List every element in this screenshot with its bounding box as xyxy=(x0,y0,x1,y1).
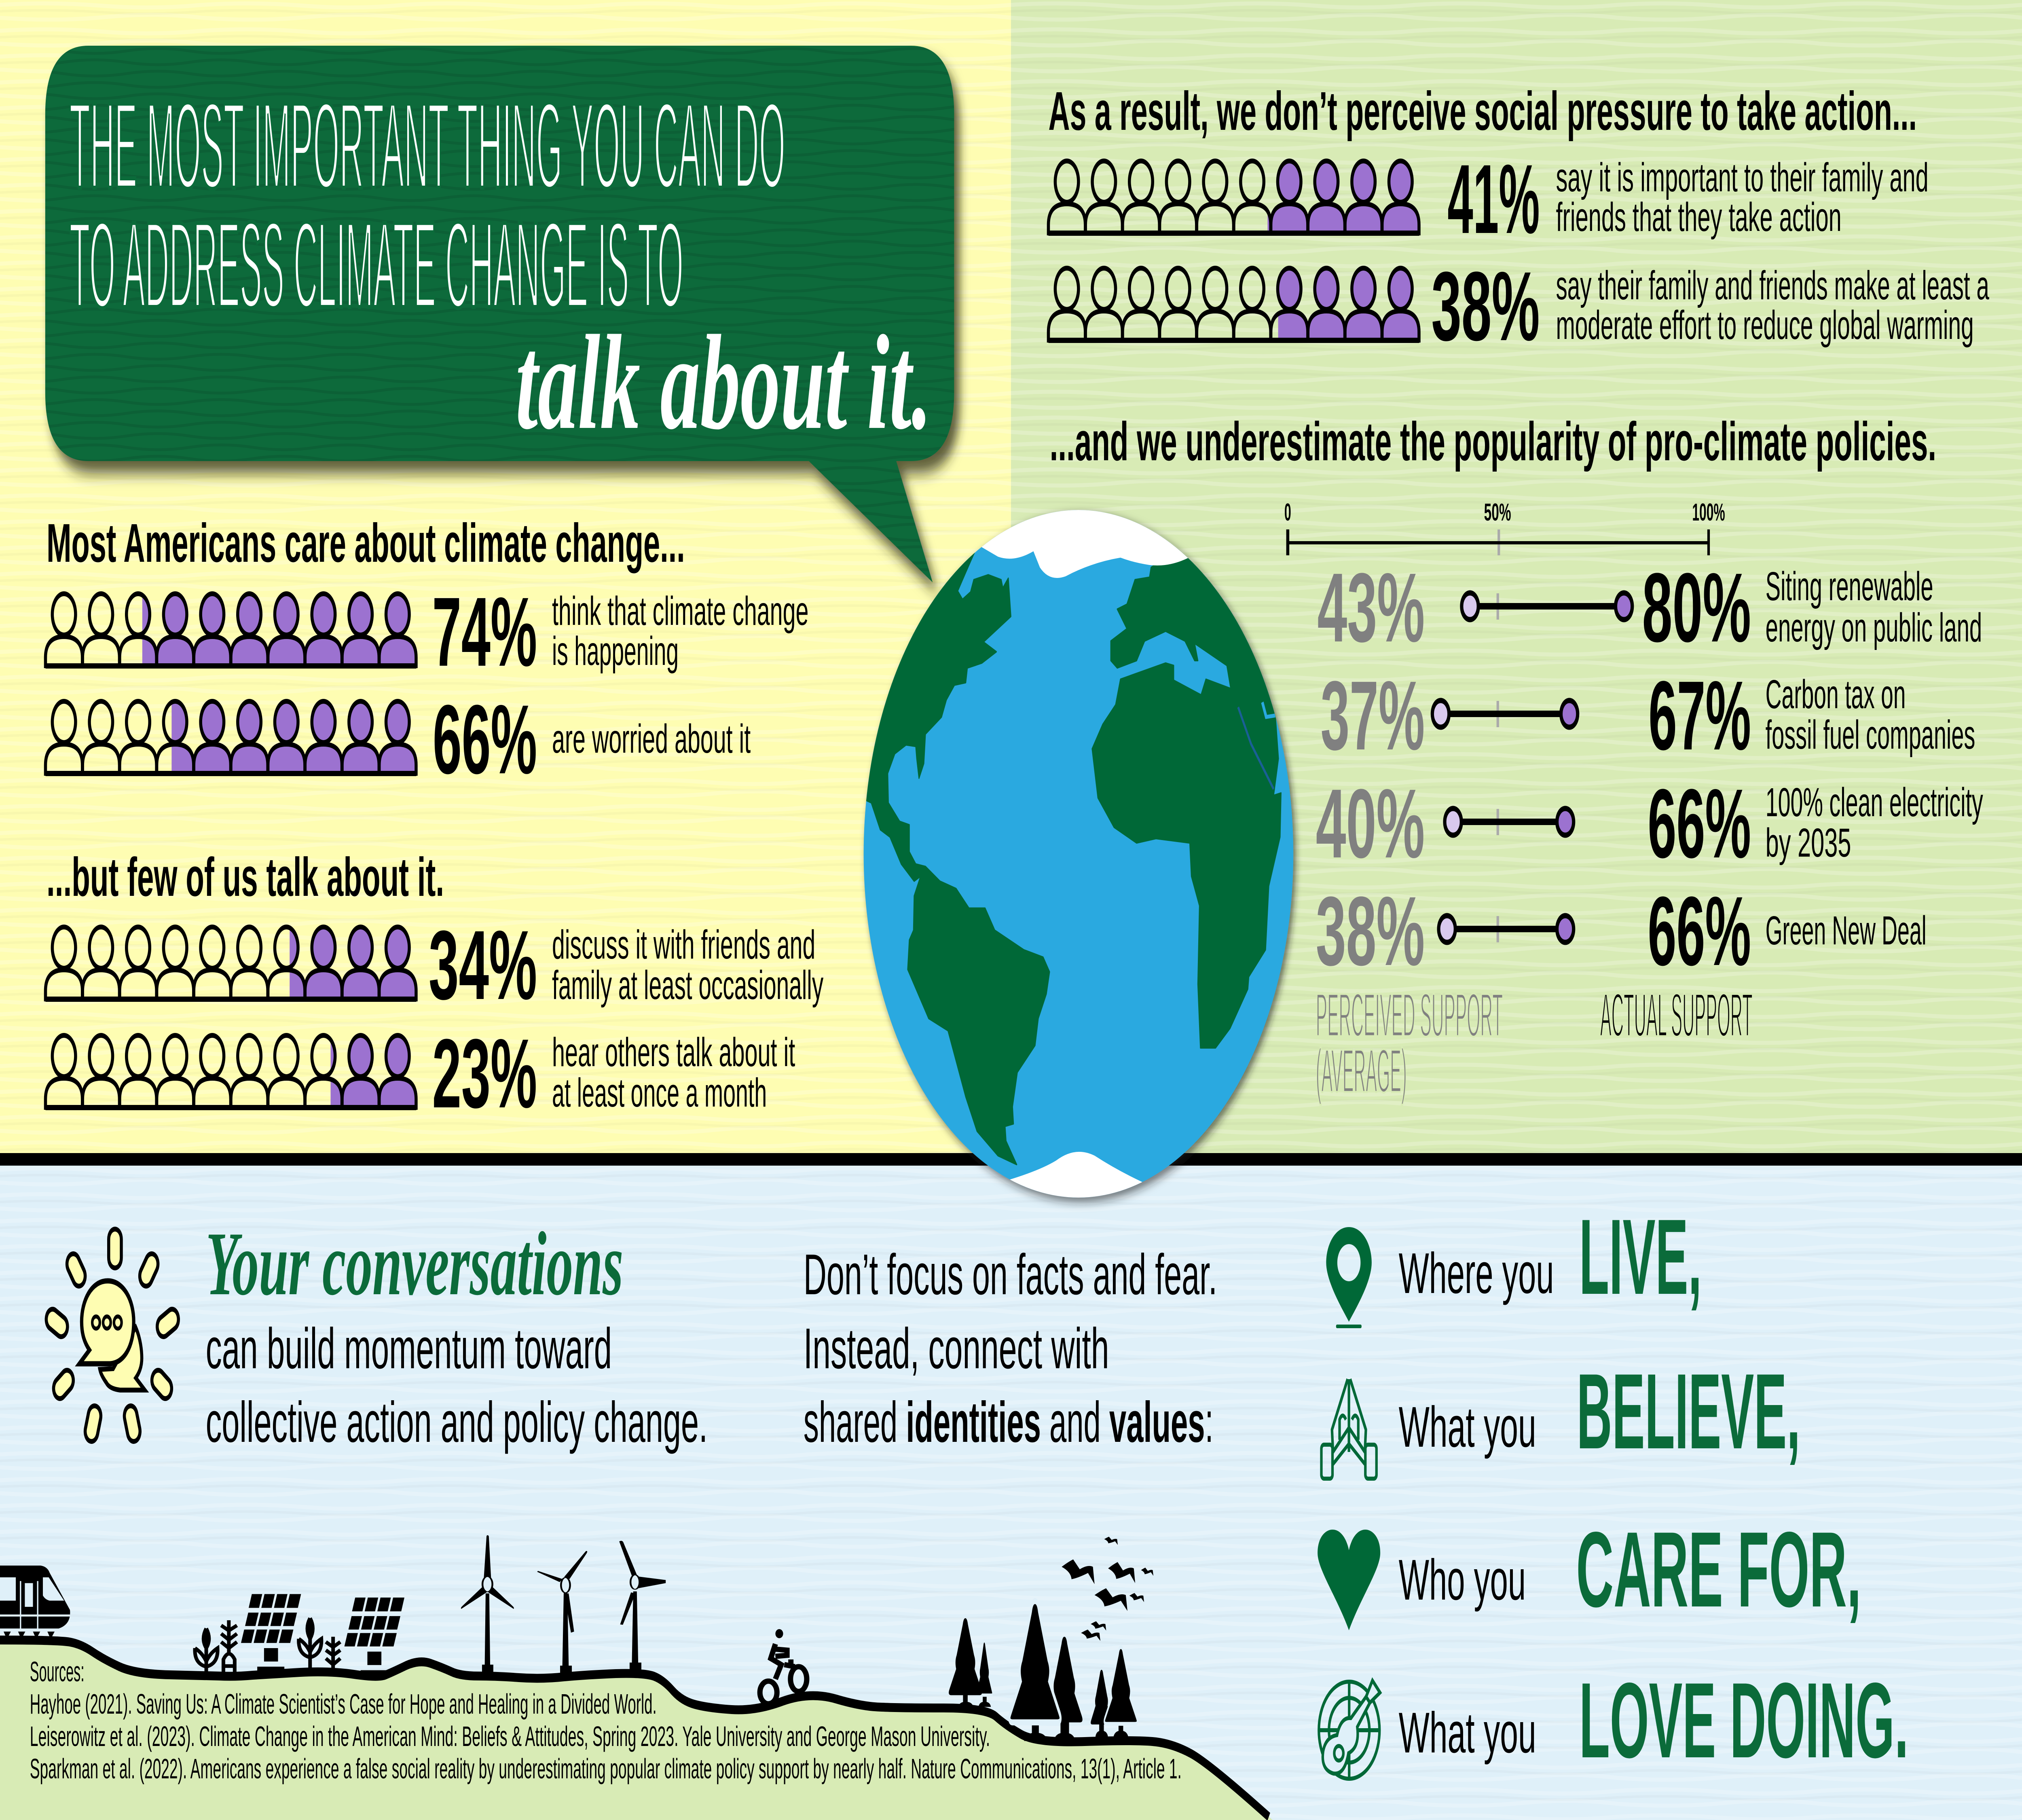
description: discuss: discuss it with friends and xyxy=(552,922,815,967)
row: carbon tax: 67% xyxy=(1648,661,1751,770)
row: carbon tax xyxy=(1321,661,1975,770)
pictogram: 34 percent xyxy=(45,927,416,1002)
icon: solar panel xyxy=(241,1594,301,1674)
text: don't focus on facts: Instead, connect with xyxy=(804,1317,1109,1381)
dumbbell chart: ACTUAL SUPPORT xyxy=(1600,980,1753,1049)
description: family: family at least occasionally xyxy=(552,963,823,1008)
row: siting renewable: Siting renewable xyxy=(1766,564,1933,609)
row: clean electricity: 66% xyxy=(1648,769,1751,878)
sources: Hayhoe (2021). Saving Us: A Climate Scientist’s Case for Hope and Healing in a Divided World. xyxy=(30,1689,657,1720)
heading: few talk about it: ...but few of us talk about it. xyxy=(47,847,444,908)
text: don't focus on facts: shared identities and values: xyxy=(804,1390,1214,1454)
sources xyxy=(30,1656,1182,1785)
icon: cyclist xyxy=(760,1629,807,1704)
title emphasis: talk about it. xyxy=(516,308,932,457)
word: live: LIVE, xyxy=(1579,1197,1702,1316)
label: what you: What you xyxy=(1399,1701,1536,1765)
row: siting renewable: 80% xyxy=(1642,553,1751,662)
stat row: 34% xyxy=(45,910,823,1020)
text: don't focus on facts xyxy=(804,1243,1217,1454)
row: green new deal xyxy=(1316,876,1927,986)
axis: 0 xyxy=(1284,499,1291,526)
word: love doing: LOVE DOING. xyxy=(1579,1660,1908,1780)
row: carbon tax: fossil fuel companies xyxy=(1766,712,1975,758)
row: siting renewable: energy on public land xyxy=(1766,605,1982,650)
description: monthly: at least once a month xyxy=(552,1070,767,1115)
icon: location pin xyxy=(1326,1227,1372,1328)
icon: solar panel xyxy=(345,1598,404,1677)
number: 38%: 38% xyxy=(1431,252,1540,361)
icon: wind turbines xyxy=(461,1535,666,1674)
heading: most Americans care: Most Americans care about climate change... xyxy=(47,512,685,574)
heading: your conversations: Your conversations xyxy=(206,1213,623,1314)
icon: plants xyxy=(195,1618,341,1674)
icon: heart xyxy=(1318,1530,1380,1630)
description: worried: are worried about it xyxy=(552,716,751,762)
globe xyxy=(840,509,1317,1199)
label: where you: Where you xyxy=(1399,1242,1554,1306)
stat row: 41% xyxy=(1048,144,1929,254)
axis: 50% xyxy=(1484,499,1511,526)
row: clean electricity: by 2035 xyxy=(1766,820,1851,866)
speech bubble xyxy=(45,46,954,582)
pictogram: 41 percent xyxy=(1048,161,1419,236)
row: carbon tax: Carbon tax on xyxy=(1766,672,1906,717)
description: hear: hear others talk about it xyxy=(552,1030,795,1075)
right landscape icons xyxy=(760,1536,1153,1741)
description: effort: say their family and friends make at least a xyxy=(1556,263,1989,308)
text: momentum line 2: collective action and policy change. xyxy=(206,1390,708,1454)
row: green new deal: 66% xyxy=(1648,876,1751,986)
left landscape icons xyxy=(0,1535,666,1677)
legend: perceived support: (AVERAGE) xyxy=(1316,1036,1407,1105)
label: what you: What you xyxy=(1399,1395,1536,1459)
pictogram: 23 percent xyxy=(45,1035,416,1110)
word: believe: BELIEVE, xyxy=(1577,1351,1800,1471)
stat row: 38% xyxy=(1048,252,1989,361)
description: think: think that climate change xyxy=(552,588,808,634)
rays xyxy=(53,1239,172,1431)
number: 34%: 34% xyxy=(429,910,537,1020)
text: momentum line 1: can build momentum toward xyxy=(206,1317,612,1381)
heading: social pressure: As a result, we don’t perceive social pressure to take action... xyxy=(1048,80,1917,142)
speech bubble: TO ADDRESS CLIMATE CHANGE IS TO xyxy=(70,197,683,333)
label: who you: Who you xyxy=(1399,1548,1526,1612)
dumbbell chart: PERCEIVED SUPPORT xyxy=(1316,980,1503,1049)
panel: yellow background xyxy=(0,0,1011,1157)
stat row: 74% xyxy=(45,577,808,687)
number: 66%: 66% xyxy=(433,685,537,794)
panel: blue background xyxy=(0,1165,2022,1820)
sources: Sparkman et al. (2022). Americans experience a false social reality by underestimating popular climate policy support by nearly half. Nature Communications, 13(1), Article 1. xyxy=(30,1753,1182,1785)
pictogram: 66 percent xyxy=(45,701,416,776)
list row: love doing xyxy=(1319,1660,1908,1780)
divider band xyxy=(0,1153,2022,1166)
pictogram: 74 percent xyxy=(45,594,416,669)
stat row: 23% xyxy=(45,1019,795,1128)
ground hill xyxy=(0,1640,1273,1820)
description: happening: is happening xyxy=(552,629,679,674)
description: reduce: moderate effort to reduce global warming xyxy=(1556,303,1974,348)
row: clean electricity: 100% clean electricity xyxy=(1766,780,1983,825)
landscape xyxy=(0,1535,1273,1820)
description: take action: friends that they take action xyxy=(1556,195,1842,240)
icon: trees xyxy=(949,1601,1138,1741)
sources: Leiserowitz et al. (2023). Climate Change in the American Mind: Beliefs & Attitudes, Spring 2023. Yale University and George Mason University. xyxy=(30,1721,990,1752)
row: clean electricity: 40% xyxy=(1316,769,1425,878)
row: clean electricity xyxy=(1316,769,1983,878)
number: 41%: 41% xyxy=(1447,144,1540,254)
list row: live xyxy=(1326,1197,1702,1328)
list row: care for xyxy=(1318,1509,1861,1630)
legend: perceived support xyxy=(1316,980,1503,1105)
icon: praying hands xyxy=(1322,1379,1377,1479)
speech bubble: THE MOST IMPORTANT THING YOU CAN DO xyxy=(70,78,785,214)
row: green new deal: Green New Deal xyxy=(1766,908,1927,953)
number: 23%: 23% xyxy=(432,1019,537,1128)
icon: guitar and record xyxy=(1319,1680,1380,1779)
dumbbell chart xyxy=(1284,499,1983,1105)
icon: birds xyxy=(1062,1536,1153,1641)
stat row: 66% xyxy=(45,685,751,794)
row: siting renewable: 43% xyxy=(1318,553,1425,662)
sources: Sources: xyxy=(30,1656,85,1688)
panel: green background xyxy=(1011,0,2022,1157)
text: don't focus on facts: Don’t focus on facts and fear. xyxy=(804,1243,1217,1307)
number: 74%: 74% xyxy=(432,577,537,687)
icon: sun with speech bubbles xyxy=(53,1239,172,1431)
row: siting renewable xyxy=(1318,553,1982,662)
list row: believe xyxy=(1322,1351,1800,1479)
row: green new deal: 38% xyxy=(1316,876,1425,986)
pictogram: 38 percent xyxy=(1048,268,1419,343)
row: carbon tax: 37% xyxy=(1321,661,1425,770)
axis: 100% xyxy=(1692,499,1725,526)
icon: train xyxy=(0,1566,70,1637)
axis xyxy=(1284,499,1725,555)
description: important: say it is important to their family and xyxy=(1556,155,1929,200)
word: care for: CARE FOR, xyxy=(1576,1509,1861,1629)
